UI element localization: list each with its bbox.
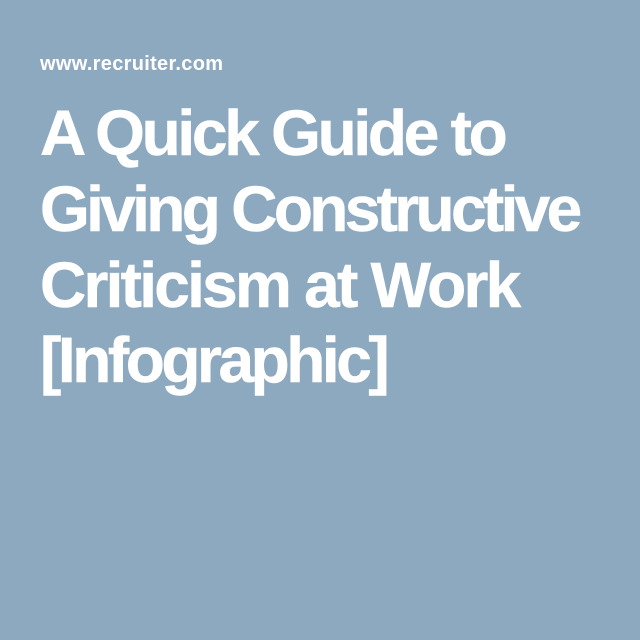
title xyxy=(40,97,580,396)
title: Giving Constructive xyxy=(40,173,579,245)
title: [Infographic] xyxy=(40,324,386,396)
source url: www.recruiter.com xyxy=(40,53,223,75)
title: A Quick Guide to xyxy=(40,97,504,169)
title: Criticism at Work xyxy=(40,249,518,321)
